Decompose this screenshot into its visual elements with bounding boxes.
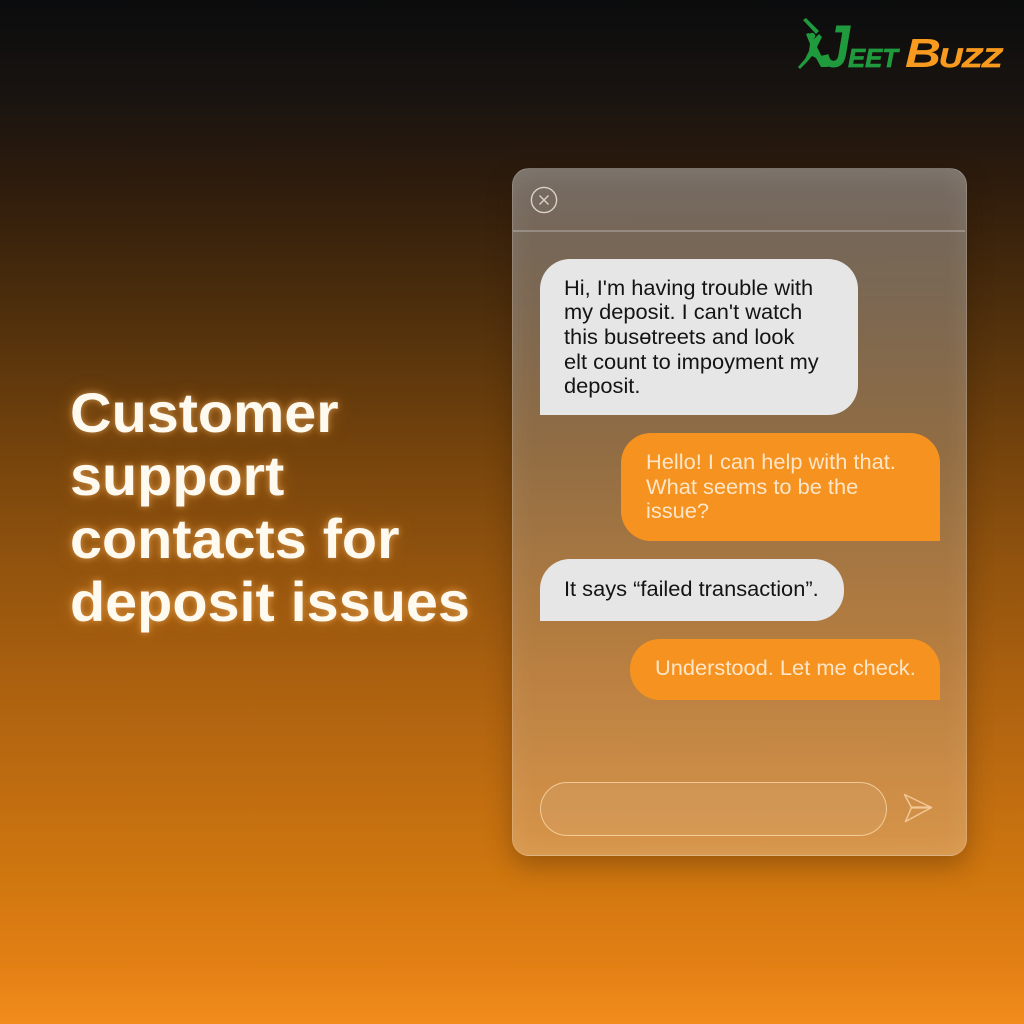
message: agent greeting: [620, 432, 940, 540]
icon: send arrow: [904, 794, 932, 822]
message: user deposit trouble: Hi, I'm having trouble with: [564, 276, 813, 300]
title: support: [70, 444, 284, 507]
title: Customer: [70, 381, 339, 444]
input field: [540, 782, 887, 836]
message: agent greeting: What seems to be the: [646, 476, 858, 499]
message: agent greeting: Hello! I can help with that.: [646, 451, 895, 474]
message: agent checking: Understood. Let me check.: [654, 657, 915, 680]
wordmark: EET: [848, 43, 900, 73]
message: agent checking: [630, 638, 940, 700]
message: user deposit trouble: elt count to impoyment my: [564, 351, 818, 374]
message: user deposit trouble: this busɵtreets and look: [564, 326, 794, 349]
message: user deposit trouble: deposit.: [564, 375, 640, 398]
title: contacts for: [70, 507, 399, 570]
panel: chat window: [512, 168, 967, 856]
message: agent greeting: issue?: [646, 500, 709, 523]
wordmark: [821, 13, 1004, 80]
message: user deposit trouble: my deposit. I can't watch: [564, 301, 802, 324]
icon: close button: [530, 186, 558, 214]
wordmark: B: [905, 30, 941, 75]
message: failed transaction: [540, 558, 844, 620]
title: [66, 381, 472, 636]
title: deposit issues: [70, 570, 470, 633]
message: failed transaction: It says “failed transaction”.: [564, 578, 818, 601]
icon: cricket player: [798, 18, 828, 69]
message: user deposit trouble: [540, 258, 858, 414]
wordmark: UZZ: [939, 43, 1004, 73]
logo: [798, 15, 1004, 75]
